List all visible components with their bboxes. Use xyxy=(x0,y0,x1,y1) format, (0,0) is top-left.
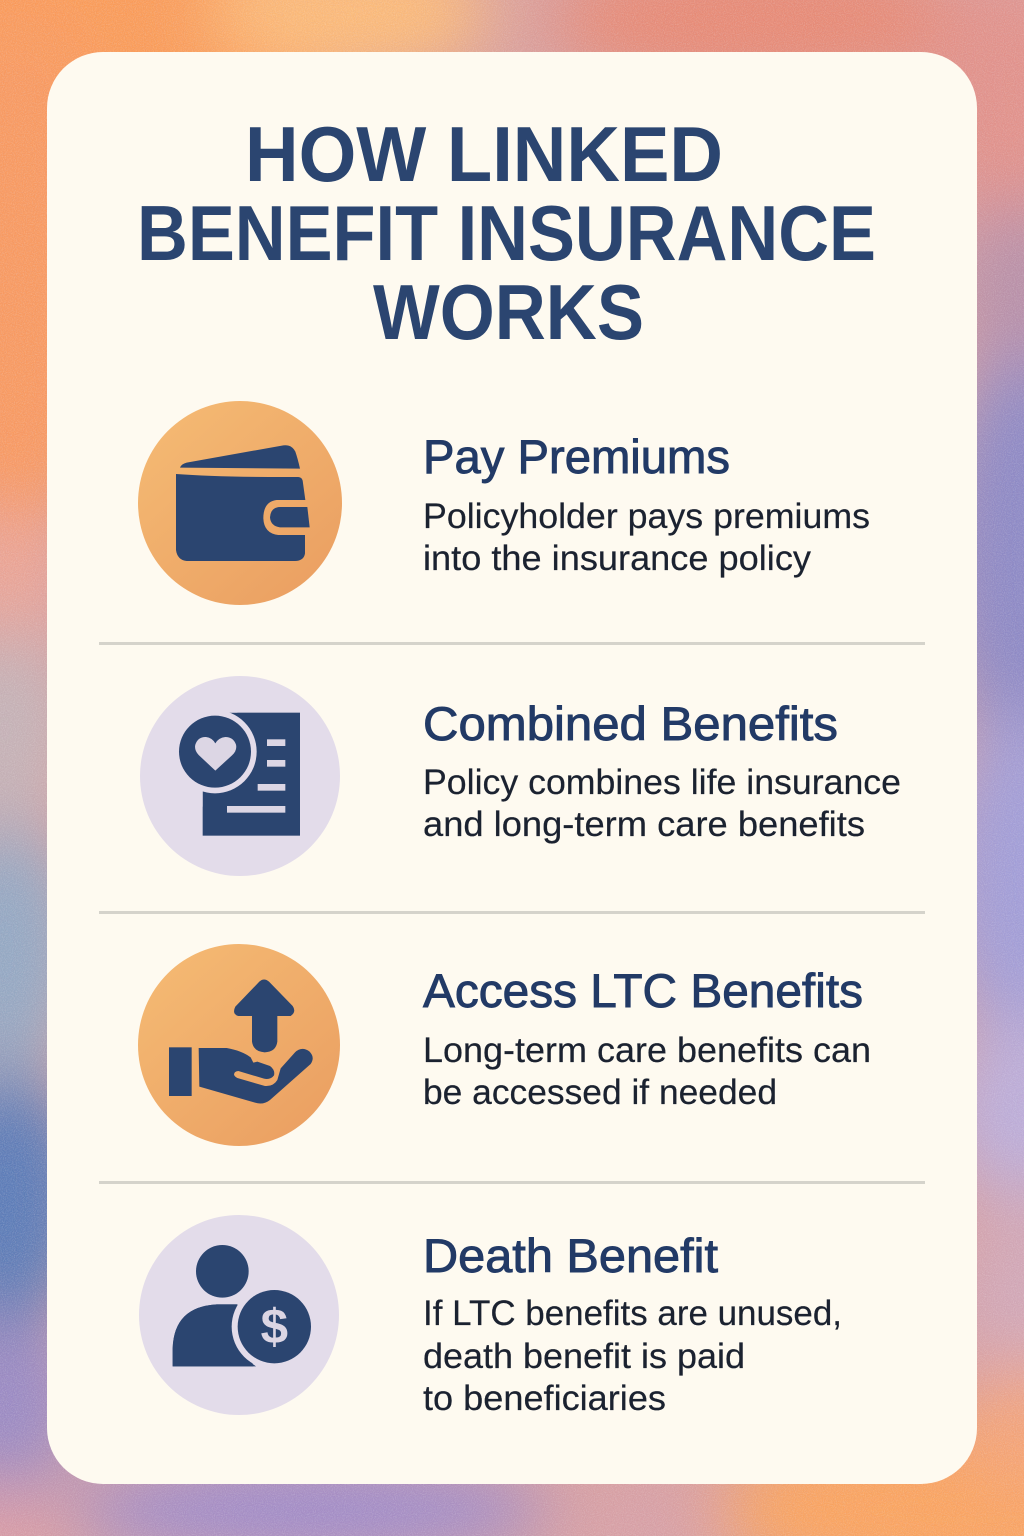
title: WORKS xyxy=(373,268,644,356)
text: combined benefits description: and long-term care benefits xyxy=(423,805,865,844)
icon: wallet xyxy=(138,401,342,605)
text: pay premiums description: into the insurance policy xyxy=(423,539,812,578)
title: BENEFIT INSURANCE xyxy=(137,189,876,277)
heading: death benefit: Death Benefit xyxy=(423,1229,718,1282)
text: death benefit description: to beneficiaries xyxy=(423,1379,666,1418)
text: access ltc benefits description: Long-term care benefits can xyxy=(423,1031,871,1070)
icon: person with dollar coin xyxy=(139,1215,339,1415)
heading: pay premiums: Pay Premiums xyxy=(423,430,730,483)
text: pay premiums description: Policyholder pays premiums xyxy=(423,497,870,536)
text: death benefit description xyxy=(423,1294,842,1418)
text: death benefit description: death benefit is paid xyxy=(423,1337,745,1376)
heading: combined benefits: Combined Benefits xyxy=(423,697,838,750)
text: access ltc benefits description xyxy=(423,1031,871,1112)
text: combined benefits description xyxy=(423,763,901,844)
icon: policy document with heart xyxy=(140,676,340,876)
step 1: pay premiums xyxy=(138,401,870,605)
text: pay premiums description xyxy=(423,497,870,578)
title: HOW LINKED xyxy=(245,110,723,198)
icon: person with dollar coin: $ xyxy=(261,1299,288,1354)
step 2: combined benefits xyxy=(140,676,901,876)
step 4: death benefit xyxy=(139,1215,842,1418)
icon: hand with up arrow xyxy=(138,944,340,1146)
step 3: access ltc benefits xyxy=(138,944,871,1146)
text: access ltc benefits description: be accessed if needed xyxy=(423,1073,777,1112)
text: death benefit description: If LTC benefits are unused, xyxy=(423,1294,842,1333)
title xyxy=(137,110,876,356)
text: combined benefits description: Policy combines life insurance xyxy=(423,763,901,802)
heading: access ltc benefits: Access LTC Benefits xyxy=(423,964,863,1017)
